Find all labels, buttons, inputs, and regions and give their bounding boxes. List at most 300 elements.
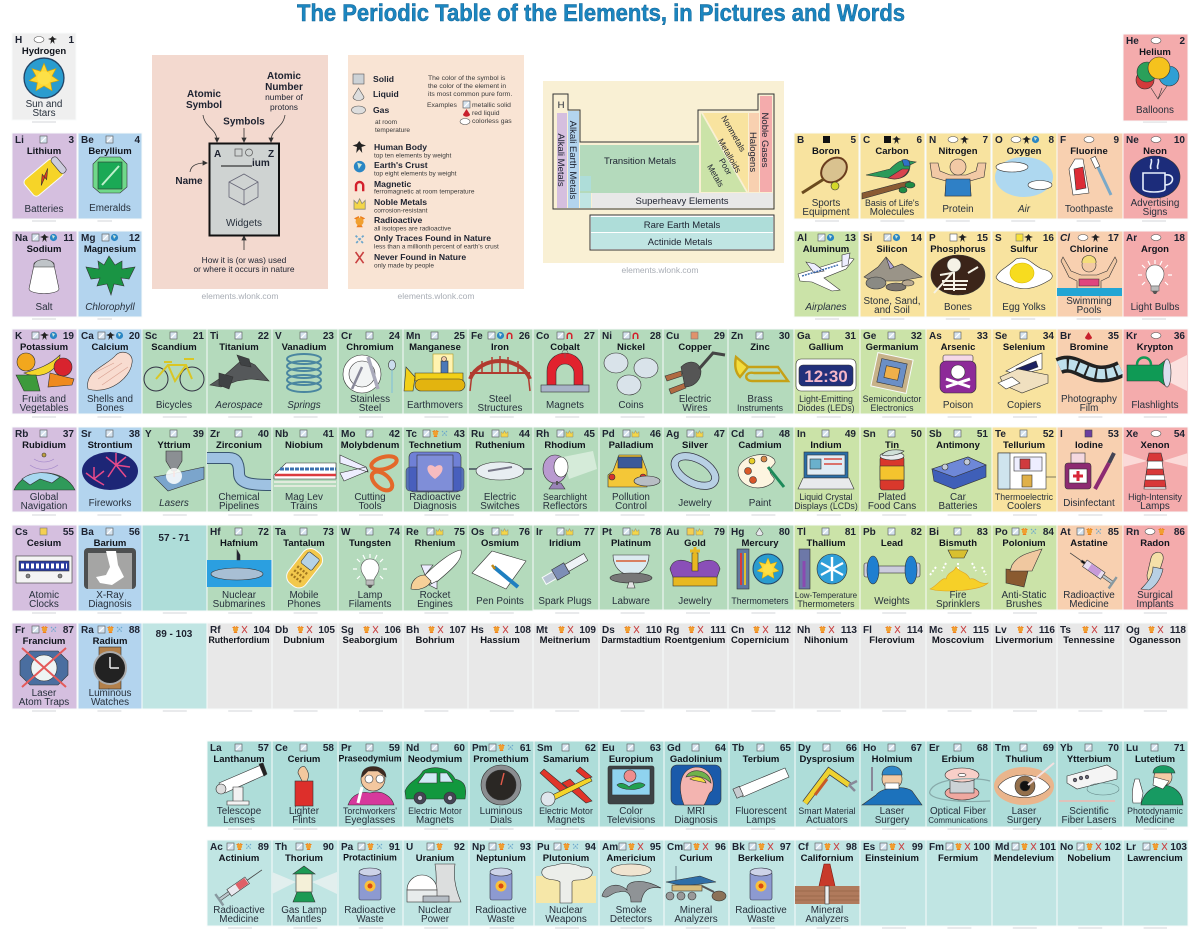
tile: Hydrogen: H	[15, 35, 22, 46]
icon: disinfectant bottle and dropper	[1065, 453, 1114, 489]
legend: radioactive: Radioactive	[374, 215, 422, 225]
tile: Moscovium: Mc	[929, 625, 943, 636]
tile: Rubidium: Global	[30, 492, 58, 503]
tile: Silver: 47	[714, 429, 725, 440]
tile: Sulfur: Egg Yolks	[1002, 302, 1046, 313]
tile: Boron: 5	[850, 135, 856, 146]
tile: Neptunium: 93	[520, 842, 531, 853]
tile: Neptunium: Np	[472, 842, 485, 853]
panel: element families map	[543, 81, 784, 263]
icon: fiber laser box	[1059, 765, 1119, 801]
tile: Promethium: Promethium	[473, 754, 529, 765]
tile: Iron: Steel	[489, 394, 511, 405]
tile: Germanium	[860, 329, 926, 414]
tile: Polonium: Anti-Static	[1001, 590, 1047, 601]
tile: Chlorine: Swimming	[1066, 296, 1112, 307]
tile: Calcium: 20	[129, 331, 140, 342]
sample element tile: ium	[252, 158, 270, 169]
tile: Tellurium: Te	[995, 429, 1006, 440]
icon: food can	[880, 450, 904, 490]
tile: Ruthenium: Ru	[471, 429, 484, 440]
tile: Potassium: 19	[63, 331, 74, 342]
tile: Gallium	[794, 329, 860, 414]
tile: Palladium: Pd	[602, 429, 615, 440]
tile: Holmium: 67	[911, 743, 922, 754]
tile: Cesium	[12, 525, 77, 611]
tile: Lithium: Li	[15, 135, 24, 146]
tile: Meitnerium: Meitnerium	[540, 635, 590, 646]
icon: thermoelectric cooler	[998, 453, 1056, 489]
tile: Copper: Wires	[682, 403, 708, 414]
icon: salt shaker	[29, 260, 59, 294]
tile: Uranium: U	[406, 842, 413, 853]
tile: Rhenium: Rhenium	[415, 538, 455, 549]
tile: Seaborgium	[338, 623, 403, 709]
text: symbol colour note: colorless gas	[472, 118, 512, 125]
tile: Argon: Argon	[1141, 244, 1169, 255]
icon: spark plug	[541, 552, 589, 586]
tile: Silicon: Si	[863, 233, 873, 244]
tile: Californium: Analyzers	[805, 914, 849, 925]
tile: Chlorine	[1057, 231, 1123, 317]
icon: optical fiber spool	[930, 768, 990, 802]
tile: Praseodymium: Pr	[341, 743, 352, 754]
tile: Europium: 63	[650, 743, 661, 754]
tile: Flerovium: Fl	[863, 625, 872, 636]
tile: Tennessine: Ts	[1060, 625, 1071, 636]
tile: Radon: Implants	[1136, 599, 1174, 610]
tile: Copernicium: Cn	[731, 625, 744, 636]
legend: earth's crust	[354, 160, 457, 178]
legend: never found: only made by people	[374, 262, 434, 270]
tile: Barium	[78, 525, 142, 611]
tile: Radium	[78, 623, 142, 709]
tile: Bismuth: Sprinklers	[936, 599, 980, 610]
icon: heart scan	[406, 452, 464, 492]
tile: Uranium	[403, 840, 469, 926]
tile: Cerium: 58	[323, 743, 334, 754]
tile: Einsteinium: 99	[912, 842, 923, 853]
tile: Tantalum: Phones	[287, 599, 321, 610]
tile: Terbium: Tb	[732, 743, 744, 754]
tile: Nickel: Coins	[618, 400, 644, 411]
tile: Niobium: Trains	[290, 501, 318, 512]
tile: Boron: Sports	[812, 198, 840, 209]
legend: only traces: Only Traces Found in Nature	[374, 233, 491, 243]
tile: Phosphorus	[926, 231, 991, 317]
tile: Thallium	[794, 525, 860, 610]
tile: Beryllium	[78, 133, 142, 219]
tile: Carbon: Carbon	[875, 146, 909, 157]
tile: Selenium	[992, 329, 1057, 414]
tile: Seaborgium: Seaborgium	[343, 635, 397, 646]
legend: never found	[356, 252, 466, 270]
tile: Germanium: Electronics	[870, 403, 914, 413]
tile: Hydrogen: 1	[68, 35, 74, 46]
tile: Helium	[1123, 34, 1188, 121]
placeholder: lanthanides 57-71: 57 - 71	[158, 533, 190, 544]
tile: Ytterbium: Scientific	[1069, 806, 1109, 817]
tile: Indium	[794, 427, 860, 512]
tile: Tin: Plated	[878, 492, 906, 503]
tile: Strontium: Fireworks	[89, 498, 131, 509]
tile: Tellurium	[992, 427, 1057, 512]
tile: Technetium	[403, 427, 468, 512]
tile: Antimony: Antimony	[936, 440, 981, 451]
tile: Tellurium: Coolers	[1007, 501, 1041, 512]
tile: Ytterbium	[1057, 741, 1123, 827]
tile: Hassium: 108	[514, 625, 531, 636]
tile: Sodium	[12, 231, 77, 317]
tile: Germanium: Germanium	[866, 342, 918, 353]
tile: Arsenic: Poison	[943, 400, 973, 411]
tile: Lutetium: 71	[1174, 743, 1185, 754]
tile: Lead: 82	[911, 527, 922, 538]
panel: element families map: Poor	[717, 156, 734, 177]
tile: Silver: Jewelry	[678, 498, 712, 509]
tile: Einsteinium: Es	[863, 842, 876, 853]
tile: Osmium	[468, 525, 533, 611]
tile: Promethium	[469, 741, 534, 827]
tile: Thallium: Tl	[797, 527, 806, 538]
tile: Bismuth: 83	[977, 527, 988, 538]
icon: red electromagnet	[541, 350, 589, 392]
legend: magnetic: Magnetic	[374, 179, 411, 189]
panel: legend of symbols	[348, 55, 524, 289]
tile: Tantalum: Ta	[275, 527, 286, 538]
icon: rocket engine	[411, 550, 461, 590]
tile: Bohrium: 107	[449, 625, 466, 636]
tile: Ytterbium: Ytterbium	[1067, 754, 1111, 765]
tile: Livermorium	[992, 623, 1057, 709]
tile: Terbium: Lamps	[746, 815, 776, 826]
tile: Fermium: 100	[973, 842, 990, 853]
tile: Terbium: Terbium	[743, 754, 779, 765]
sample element tile	[210, 144, 279, 236]
tile: Mendelevium: 101	[1039, 842, 1056, 853]
icon: surgeon	[1132, 766, 1183, 805]
panel: element families map: Alkali Metals	[555, 133, 566, 187]
icon: fluorescent tube	[733, 768, 789, 798]
tile: Iridium: Ir	[536, 527, 543, 538]
tile: Plutonium: Pu	[537, 842, 550, 853]
sample element tile: Widgets	[226, 218, 262, 229]
tile: Iridium	[533, 525, 599, 610]
tile: Tungsten: Tungsten	[349, 538, 391, 549]
tile: Osmium: 76	[519, 527, 530, 538]
tile: Cadmium	[728, 427, 794, 512]
icon: pen and paper	[472, 551, 526, 589]
tile: Berkelium: Berkelium	[738, 853, 784, 864]
tile: Iodine: Disinfectant	[1063, 498, 1115, 509]
tile: Neodymium: Magnets	[416, 815, 454, 826]
tile: Tungsten: 74	[389, 527, 400, 538]
tile: Californium: 98	[846, 842, 857, 853]
tile: Barium: Ba	[81, 527, 94, 538]
icon: dumbbell	[864, 556, 920, 584]
tile: Gadolinium: 64	[715, 743, 726, 754]
tile: Chromium: Stainless	[350, 394, 390, 405]
tile: Iodine: 53	[1108, 429, 1119, 440]
tile: Rutherfordium	[207, 623, 272, 709]
icon: copier	[998, 353, 1048, 393]
tile: Silver	[663, 427, 728, 512]
tile: Tungsten: Filaments	[349, 599, 391, 610]
tile: Lead: Lead	[881, 538, 903, 549]
tile: Lawrencium: Lawrencium	[1127, 853, 1183, 864]
tile: Yttrium: 39	[193, 429, 204, 440]
tile: Beryllium: 4	[134, 135, 140, 146]
tile: Xenon: Lamps	[1140, 501, 1170, 512]
tile: Chlorine: Chlorine	[1070, 244, 1108, 255]
label: atomic number: protons	[270, 102, 298, 112]
icon: laptop	[798, 452, 854, 489]
legend: noble metals	[354, 197, 428, 214]
tile: Gadolinium	[664, 741, 729, 827]
tile: Aluminum	[794, 231, 859, 317]
panel: element families map: Actinide Metals	[648, 237, 712, 248]
tile: Magnesium: 12	[129, 233, 140, 244]
tile: Nickel: 28	[650, 331, 661, 342]
tile: Zinc: Instruments	[737, 403, 784, 413]
tile: Iridium: Spark Plugs	[538, 596, 592, 607]
tile: Titanium	[207, 329, 272, 414]
icon: skeleton	[931, 255, 985, 295]
tile: Selenium: 34	[1043, 331, 1054, 342]
tile: Strontium: Strontium	[88, 440, 132, 451]
tile: Flerovium: 114	[907, 625, 923, 636]
tile: Rubidium: Rubidium	[22, 440, 66, 451]
tile: Vanadium: Springs	[287, 400, 321, 411]
tile: Helium: Balloons	[1136, 105, 1174, 116]
tile: Rhodium	[533, 427, 599, 512]
tile: Nickel	[599, 329, 663, 414]
panel: element families map: Transition Metals	[604, 156, 676, 167]
tile: Rhenium: 75	[454, 527, 465, 538]
tile: Oganesson	[1123, 623, 1188, 709]
tile: Actinium: Ac	[210, 842, 223, 853]
tile: Radium: Luminous	[89, 688, 131, 699]
tile: Dysprosium: Actuators	[806, 815, 848, 826]
tile: Zirconium: Pipelines	[219, 501, 259, 512]
panel: element families map: H	[558, 100, 565, 111]
tile: Thulium: Surgery	[1007, 815, 1041, 826]
tile: Potassium: Fruits and	[22, 394, 66, 405]
text: symbol colour note: Examples	[427, 102, 457, 109]
icon: sun	[24, 58, 64, 98]
tile: Moscovium: Moscovium	[932, 635, 984, 646]
tile: Polonium: 84	[1043, 527, 1054, 538]
tile: Meitnerium	[533, 623, 599, 709]
tile: Hafnium: Hafnium	[220, 538, 258, 549]
tile: Technetium: Technetium	[409, 440, 461, 451]
tile: Radium: Ra	[81, 625, 94, 636]
tile: Manganese: Manganese	[409, 342, 461, 353]
tile: Promethium: 61	[520, 743, 531, 754]
tile: Lawrencium: 103	[1170, 842, 1187, 853]
tile: Osmium: Osmium	[481, 538, 519, 549]
tile: Thorium: 90	[323, 842, 334, 853]
tile: Vanadium	[272, 329, 338, 414]
icon: paint palette	[738, 455, 784, 488]
legend: radioactive: all isotopes are radioactive	[374, 226, 451, 232]
tile: Argon: Light Bulbs	[1131, 302, 1179, 313]
tile: Phosphorus: 15	[977, 233, 988, 244]
tile: Bromine: 35	[1108, 331, 1119, 342]
tile: Promethium: Pm	[472, 743, 488, 754]
tile: Niobium: Nb	[275, 429, 288, 440]
tile: Thorium: Thorium	[285, 853, 323, 864]
tile: Astatine: 85	[1108, 527, 1119, 538]
icon: surgical implant	[1141, 552, 1163, 590]
tile: Silicon: 14	[911, 233, 922, 244]
tile: Thulium: 69	[1043, 743, 1054, 754]
tile: Flerovium	[860, 623, 926, 709]
tile: Neon: Advertising	[1131, 198, 1179, 209]
tile: Mendelevium	[992, 840, 1057, 926]
tile: Fluorine: F	[1060, 135, 1066, 146]
tile: Yttrium: Lasers	[159, 498, 189, 509]
tile: Aluminum: Aluminum	[803, 244, 849, 255]
tile: Tellurium: 52	[1043, 429, 1054, 440]
icon: laser atom trap	[20, 648, 68, 687]
tile: Hafnium: 72	[258, 527, 269, 538]
icon: thermometer and snowflake	[799, 549, 847, 589]
label: atomic symbol: Symbol	[186, 100, 222, 111]
tile: Darmstadtium: Darmstadtium	[601, 635, 661, 645]
tile: Berkelium	[729, 840, 795, 926]
legend: human body: top ten elements by weight	[374, 152, 452, 160]
tile: Radium: 88	[129, 625, 140, 636]
panel: element families map: Metalloids	[716, 137, 743, 174]
tile: Ruthenium: 44	[519, 429, 530, 440]
icon: searchlight	[543, 451, 597, 489]
tile: Calcium: Calcium	[92, 342, 128, 353]
tile: Roentgenium: Roentgenium	[665, 635, 725, 646]
tile: Berkelium: Radioactive	[735, 905, 787, 916]
title: The Periodic Table of the Elements, in Pictures and Words	[297, 0, 905, 27]
tile: Scandium	[142, 329, 207, 414]
tile: Astatine: At	[1060, 527, 1071, 538]
tile: Technetium: Diagnosis	[413, 501, 457, 512]
panel: element families map: Rare Earth Metals	[644, 220, 721, 231]
icon: luminous watch	[94, 647, 126, 689]
tile: Argon: 18	[1174, 233, 1185, 244]
tile: Nobelium: Nobelium	[1067, 853, 1111, 864]
tile: Ruthenium	[468, 427, 533, 512]
tile: Rhodium: Reflectors	[543, 501, 587, 512]
tile: Tennessine: Tennessine	[1063, 635, 1115, 646]
tile: Vanadium: V	[275, 331, 282, 342]
tile: Helium: Helium	[1139, 47, 1171, 58]
tile: Lithium: Batteries	[25, 204, 64, 215]
tile: Cadmium: Cd	[731, 429, 744, 440]
tile: Cadmium: Paint	[749, 498, 772, 509]
tile: Bismuth: Bismuth	[939, 538, 977, 549]
icon: film strip	[1059, 364, 1121, 374]
tile: Mendelevium: Md	[995, 842, 1009, 853]
tile: Thallium: Low-Temperature	[795, 591, 858, 600]
tile: Magnesium: Mg	[81, 233, 95, 244]
tile: Arsenic	[926, 329, 992, 414]
tile: Polonium	[992, 525, 1057, 610]
tile: Francium: Fr	[15, 625, 25, 636]
tile: Neodymium: 60	[454, 743, 465, 754]
tile: Protactinium: Pa	[341, 842, 354, 853]
tile: Plutonium	[534, 840, 599, 926]
tile: Neodymium	[403, 741, 469, 827]
tile: Cesium: Clocks	[29, 599, 59, 610]
tile: Manganese: Mn	[406, 331, 420, 342]
tile: Fermium	[926, 840, 992, 926]
tile: Seaborgium: 106	[384, 625, 401, 636]
tile: Krypton: Krypton	[1137, 342, 1173, 353]
tile: Europium: Europium	[609, 754, 653, 765]
tile: Nitrogen: Nitrogen	[938, 146, 978, 157]
sample element tile: Z	[268, 149, 274, 160]
tile: Antimony: 51	[977, 429, 988, 440]
tile: Meitnerium: 109	[579, 625, 596, 636]
tile: Thorium: Th	[275, 842, 287, 853]
tile: Niobium: 41	[323, 429, 334, 440]
tile: Protactinium: Waste	[356, 914, 384, 925]
icon: fireworks	[82, 452, 138, 490]
tile: Europium: Televisions	[607, 815, 655, 826]
tile: Oxygen: Oxygen	[1007, 146, 1042, 157]
tile: Thorium: Gas Lamp	[281, 905, 327, 916]
tile: Oganesson: 118	[1170, 625, 1186, 636]
label: atomic number	[265, 71, 304, 112]
tile: Neptunium	[469, 840, 534, 926]
panel: legend of symbols: at room	[375, 119, 397, 126]
tile: Berkelium: Bk	[732, 842, 745, 853]
tile: Cesium: Cs	[15, 527, 28, 538]
tile: Protactinium: 91	[389, 842, 400, 853]
tile: Hydrogen: Sun and	[26, 99, 62, 110]
tile: Einsteinium	[860, 840, 926, 926]
icon: car and exhaust	[608, 455, 660, 487]
icon: chemical pipeline	[207, 458, 271, 485]
tile: Europium	[599, 741, 664, 827]
tile: Silicon: Silicon	[876, 244, 908, 255]
tile: Boron: Boron	[812, 146, 840, 157]
tile: Zinc	[728, 329, 794, 414]
tile: Meitnerium: Mt	[536, 625, 548, 636]
tile: Ytterbium: Yb	[1060, 743, 1073, 754]
tile: Cerium	[272, 741, 338, 827]
tile: Magnesium: Chlorophyll	[85, 302, 136, 313]
legend: human body	[352, 141, 452, 160]
tile: Technetium: 43	[454, 429, 465, 440]
panel: element families map: Nonmetals	[719, 114, 748, 153]
tile: Francium: Laser	[32, 688, 57, 699]
icon: x-ray	[84, 548, 136, 589]
tile: Zirconium: Zirconium	[216, 440, 262, 451]
tile: Plutonium: Weapons	[545, 914, 587, 925]
tile: Silicon	[860, 231, 925, 317]
tile: Phosphorus: Phosphorus	[930, 244, 986, 255]
tile: Moscovium: 115	[973, 625, 989, 636]
tile: Moscovium	[926, 623, 992, 709]
panel: element families map: Alkali Earth Metals	[567, 121, 578, 200]
icon: green electric car	[405, 768, 466, 804]
icon: laser cutter	[154, 451, 204, 491]
tile: Potassium: Potassium	[20, 342, 68, 353]
tile: Erbium: Er	[929, 743, 940, 754]
tile: Lead: Pb	[863, 527, 876, 538]
tile: Germanium: Ge	[863, 331, 877, 342]
tile: Hafnium: Nuclear	[222, 590, 257, 601]
